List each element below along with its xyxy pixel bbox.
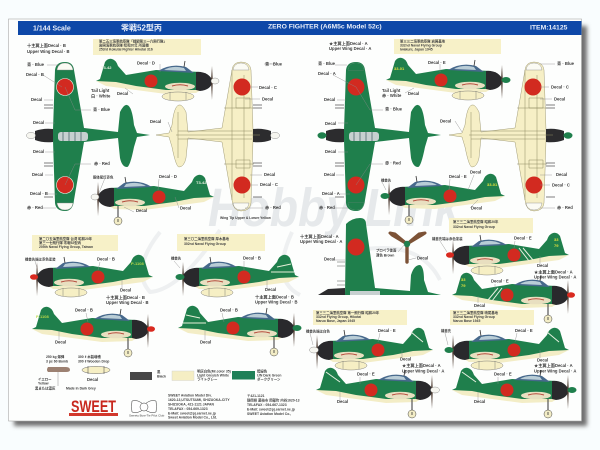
tail codes: P-1108 [36,314,49,319]
color legend: ダークグリーン [257,376,281,382]
decal callouts: Decal [554,96,565,102]
bomb and tank labels: 300 ℓ Wooden Drop [78,360,109,364]
plane: side view F [32,307,155,357]
SWEET logo: SWEET [71,397,116,416]
plane: side view K [310,328,433,370]
decal callouts: Decal [325,121,336,126]
decal callouts: 胴体尾灯赤色 [93,174,114,180]
bow tie logo: Sweety Bow-Tie Pilot Club [129,414,165,418]
decal callouts: ★主翼上面Decal · A [329,40,368,47]
decal callouts: Decal [440,118,451,124]
decal callouts: Decal [120,288,131,292]
japanese company contact: TEL&FAX : 054-667-1323 [247,403,287,407]
caption text: 332nd Naval Flying Group [400,44,442,48]
decal callouts: Upper Wing Decal · A [300,239,342,244]
decal callouts: Decal · B [30,191,48,196]
decal callouts: 赤 · Red [94,161,110,167]
decal callouts: 青 · Blue [93,106,111,113]
decal callouts: Tail Light [91,88,110,93]
decal callouts: Decal [180,206,191,210]
decal callouts: 十主翼上面Decal · B [27,42,66,49]
scale label: 1/144 Scale [33,26,71,32]
tail codes: 33-01 [394,66,405,71]
caption text: 第三三二海軍航空隊 鳴尾基地 [453,310,499,315]
decal callouts: 機首先 [171,256,182,260]
bomb and tank labels: Yellow [38,382,49,386]
decal callouts: 青 · Blue [265,60,283,68]
leader lines [35,64,555,400]
plane: side view G [176,255,299,297]
decal callouts: Decal · C [552,182,570,188]
decal callouts: Decal [200,340,211,344]
caption text [39,38,499,323]
decal callouts: Decal [537,263,548,268]
color legend: Light Greyish White [197,374,229,378]
decal callouts: Decal [408,91,419,96]
decal callouts: Decal [33,120,44,125]
decal callouts: Decal [417,256,428,260]
decal callouts: Decal [400,356,411,362]
plane: side view L [316,368,440,418]
decal callouts: Decal [33,149,44,154]
company address: SHIZUOKA, 421-1121 JAPAN [168,402,214,406]
decal callouts: Upper Wing Decal · B [255,300,298,304]
decal callouts: 青 · Blue [318,60,336,67]
company address: TEL&FAX : 054-669-1323 [168,407,208,411]
caption text: 第二〇五海軍航空隊 台湾 昭和20年 [39,236,93,241]
company address: Sweet Aviation Model Co., Ltd. [168,416,217,420]
plane: top view right [318,62,441,211]
bow tie logo [129,400,165,418]
decal callouts: Tail Light [382,88,401,93]
decal callouts: 青 · Blue [557,60,575,67]
japanese company contact: SWEET Aviation Model Co., [247,412,291,416]
decal callouts: Upper Wing Decal · B [27,49,70,54]
decal callouts: Decal [55,340,66,344]
decal callouts: Decal · C [260,182,278,187]
plane: side view B [91,175,214,225]
caption text: Iwakuni, Japan 1945 [400,48,433,52]
item number: ITEM:14125 [530,24,568,32]
decal callouts: Upper Wing Decal · A [534,274,576,280]
bomb and tank labels: 250 kg 爆弾 [46,354,65,359]
plane: side view N [452,368,576,418]
propeller diagram [390,233,425,262]
tail codes: T3-42 [196,180,207,185]
caption text: 332nd Flying Group, Hikotai [316,315,361,319]
decal callouts: Decal [470,170,481,174]
tail codes: 79 [554,243,559,248]
header bar [18,21,582,35]
bomb and tank labels: Decal [87,377,98,382]
decal callouts: Decal [31,97,42,102]
decal callouts: Decal · E [378,328,396,333]
color legend: 黒 [157,369,161,374]
tail codes: 79 [461,283,466,288]
color legend: ライトグレー [197,376,218,382]
decal callouts: Upper Wing Decal · B [106,300,149,305]
decal callouts: 機首先 [381,178,392,182]
decal callouts: Decal [324,172,335,177]
decal callouts: Decal · E [449,174,467,179]
decal callouts: Decal · B [26,72,44,77]
decal callouts: 赤 · White [382,93,402,99]
decal callouts: Decal · B [75,308,93,312]
decal callouts: 機首先端は白色 [306,328,330,334]
decal callouts: Decal [150,119,161,124]
decal callouts: 機首先 [441,328,452,333]
color legend: 暗緑色 [257,368,268,374]
decal callouts: Decal [471,206,482,210]
decal callouts: Decal · E [428,60,446,65]
plane: bottom view left [156,62,280,211]
decal callouts: 十主翼上面Decal · A [300,233,339,240]
color legend [130,368,282,382]
decal callouts: Decal · E [494,372,512,376]
decal callouts: 薄色 Brown [376,252,394,258]
color legend: Black [157,374,166,378]
decal callouts: プロペラ後面 [376,248,397,252]
bomb and drop tank [47,366,110,386]
decal callouts: Decal · C [259,85,277,90]
tail codes: P-1108 [131,261,144,266]
caption text: 第三〇二海軍航空隊 厚木基地 [184,236,230,241]
japanese company contact [247,394,300,416]
plane: top view left [26,62,150,211]
plane: side view J [452,273,575,323]
decal callouts: 機首先端は赤色塗装 [432,236,463,241]
caption text: 302nd Naval Flying Group [184,242,226,246]
plane: bottom view right [449,62,572,211]
caption text: 332nd Naval Flying Group [453,225,495,229]
color legend: 明灰白色(Mr.color 35) [197,368,231,374]
decal callouts: 赤 · Red [319,205,335,211]
decal callouts: Decal · B [243,256,261,260]
caption text: Naruo Base 1945 [453,319,480,323]
bomb and tank labels: 3 pc 60 Bomb [46,360,68,364]
decal callouts [25,40,576,404]
tail codes [36,65,559,319]
plane: side view D [380,174,505,224]
tail codes: 33-01 [487,182,498,187]
decal callouts: 赤 · Red [265,205,281,211]
decal callouts: Upper Wing Decal · A [402,368,444,374]
japanese company contact: E-Mail: sweet@pj.earnet.ne.jp [247,408,295,412]
decal callouts: ★主翼上面Decal · A [402,362,441,369]
decal callouts: 赤 · Red [385,160,401,166]
decal callouts: Upper Wing Decal · A [534,368,576,374]
decal callouts: Decal · E [491,278,509,284]
plane: side view I [446,233,569,275]
decal callouts: Decal · E [515,328,533,333]
bomb and tank labels: 300 ℓ 木製増槽 [78,354,101,359]
watermark [142,178,463,295]
decal callouts: Decal · E [357,372,375,376]
plane: side view H [178,306,302,356]
decal callouts: Decal [324,256,335,262]
japanese title: 零戦52型丙 [121,22,162,32]
caption text: 253rd Kokutai Fighter Hikotai 316 [99,48,153,52]
decal callouts: Decal [262,96,273,102]
decal callouts: 青 · Blue [385,106,403,112]
watermark: Hobby Link [208,178,463,238]
tail codes: 33 [461,277,466,282]
caption text: 第三三二海軍航空隊 昭和20年 [453,219,499,224]
decal callouts: Wing Tip Upper & Lower Yellow [220,216,271,220]
decal callouts: ★主翼上面Decal · A [534,362,573,369]
decal callouts: Decal [537,358,548,362]
decal callouts: 十主翼上面Decal · B [255,294,294,300]
partial top view wing and tail [318,218,441,295]
caption text: 第三三二海軍航空隊 岩国基地 [400,38,446,44]
caption text: Naruo Base, Japan 1945 [316,319,355,323]
decal callouts: Decal [117,91,128,96]
bomb and tank labels: 黒または濃灰 [35,386,56,390]
color legend: IJN Dark Green [257,374,282,378]
decal callouts: Decal [474,399,485,404]
decal callouts: Decal [337,399,348,404]
decal callouts: Decal · B [220,308,238,312]
decal callouts: 機首先端は赤色塗装 [25,256,56,262]
caption text: 332nd Naval Flying Group [453,315,495,319]
decal callouts: 赤 · Red [557,205,573,211]
decal callouts: Decal · D [159,174,177,179]
decal callouts: 赤 · Red [27,205,43,211]
decal callouts: ★主翼上面Decal · A [534,268,573,276]
tail codes: T3-42 [101,65,112,70]
decal callouts: Decal [556,172,567,177]
decal callouts: Decal [32,172,43,177]
decal callouts: Decal [265,287,276,292]
bomb and tank labels: Made in Dark Grey [66,386,96,390]
decal callouts: Decal · C [551,84,569,90]
caption text: 第三一七飛行隊 零戦52型丙 [39,240,82,245]
decal callouts: Decal · A [322,191,340,196]
company address: E-Mail: sweet@pj.earnet.ne.jp [168,412,216,416]
caption text: 第二五三海軍航空隊「戦闘第三一六飛行隊」 [99,38,167,44]
tail codes: 33 [554,237,559,242]
decal callouts: 十主翼上面Decal · B [106,294,145,301]
plane: side view A [96,59,219,101]
bomb and tank labels: イエロー [38,378,52,382]
decal callouts: 青 · Blue [27,61,45,68]
decal callouts: Decal [325,149,336,154]
caption text: 岩国海軍航空隊 昭和20年 所属機 [99,42,149,48]
decal callouts: Decal [136,208,147,213]
japanese company contact: 〒421-1121 [247,394,265,398]
japanese company contact: 静岡県 藤枝市 岡部町 内谷1620-13 [247,398,300,402]
decal callouts: Decal · A [318,71,336,76]
company address: 1620-13,UTSUTSUMI, SHIZUOKA-CITY [168,398,230,402]
caption text: 205th Naval Flying Group, Taiwan [39,245,93,249]
decal callouts: 白 · White [91,92,111,100]
bomb and tank labels [35,354,109,390]
plane: side view C [386,58,510,100]
decal callouts: Upper Wing Decal · A [329,46,371,51]
decal callouts: Decal [474,303,485,308]
decal callouts: Decal · B [97,256,115,262]
company address: SWEET Aviation Model Div. [168,394,212,398]
plane: side view M [444,328,569,370]
caption boxes [32,39,534,325]
decal callouts: Decal [264,172,275,177]
decal callouts: Decal · D [137,60,155,66]
decal callouts: Decal [324,97,335,102]
english title: ZERO FIGHTER (A6M5c Model 52c) [268,24,382,30]
decal callouts: Decal · E [514,236,532,240]
plane: side view E [30,255,153,297]
company address [168,394,230,420]
caption text: 第三三二海軍航空隊 第一飛行隊 昭和20年 [316,310,380,315]
